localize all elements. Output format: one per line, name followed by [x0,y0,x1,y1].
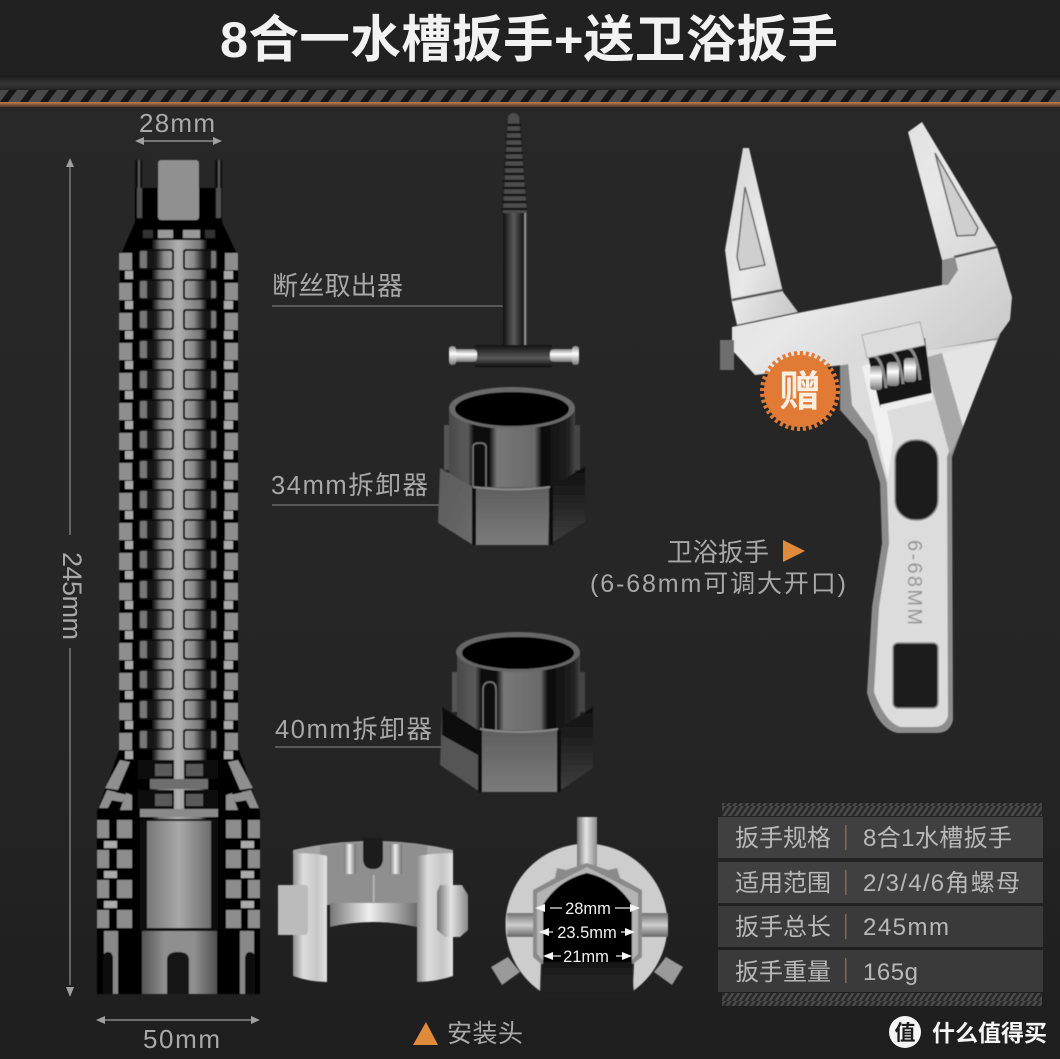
thumb screw end [720,340,734,370]
row: range: 适用范围 [735,870,831,897]
tube silhouette [97,188,260,994]
repeated knurl grid [118,249,240,759]
moving jaw [725,148,798,325]
top prongs [135,160,222,190]
label: install head [413,1020,523,1048]
header banner [0,0,1060,107]
center panel [140,819,218,930]
row: specification: 8合1水槽扳手 [863,825,1012,852]
label: bathroom wrench: (6-68mm可调大开口) [590,570,846,598]
fixed jaw and bar [732,122,1012,375]
row: length: 扳手总长 [735,914,831,941]
central light band [135,240,223,822]
label: broken screw extractor: 断丝取出器 [272,271,403,301]
gift badge [763,354,837,428]
size callouts: 28mm [565,900,611,918]
dimension: 245mm height [57,158,87,997]
row: range: 2/3/4/6角螺母 [863,870,1020,897]
row: weight: 165g [863,959,918,986]
34mm socket [438,387,585,545]
size callouts [557,900,617,966]
handle size text: 6-68MM [903,540,925,625]
dimension: 50mm width [96,1016,260,1054]
title: 8合一水槽扳手+送卫浴扳手 [220,11,838,68]
adjustable bathroom wrench [720,122,1012,733]
top square socket [158,160,199,220]
dimension: 50mm width: 50mm [143,1024,220,1054]
row: length [718,906,1043,947]
gift badge: 赠 [779,368,821,415]
40mm socket [440,632,593,792]
row: length: 245mm [863,914,949,941]
dimension: 245mm height: 245mm [57,552,87,640]
broken screw extractor tool [449,113,579,367]
side blocks [97,820,260,928]
watermark logo: 什么值得买 [932,1020,1047,1046]
row: specification [718,817,1043,858]
size callouts: 23.5mm [557,924,617,942]
label: install head: 安装头 [447,1020,523,1048]
label: 34mm remover: 34mm拆卸器 [271,472,428,500]
handle hole: oval [895,440,938,520]
watermark logo: 值 [894,1022,916,1045]
label: bathroom wrench: 卫浴扳手 [667,539,769,567]
watermark logo [889,1016,1047,1048]
sink wrench body [97,160,260,994]
row: weight: 扳手重量 [735,959,831,986]
row: weight [718,950,1043,992]
install head: side view [278,838,468,982]
label: bathroom wrench [590,539,846,598]
install head: end view with sizes [491,817,683,992]
dimension: 28mm width: 28mm [139,108,215,138]
spec table [718,803,1043,1006]
size callouts: 21mm [563,948,609,966]
foot with notch [142,931,217,994]
handle hole: slot [893,643,938,708]
knurl adjuster [867,338,933,412]
label: 40mm remover: 40mm拆卸器 [275,716,432,744]
handle and neck [840,335,1000,733]
row: range [718,862,1043,903]
flare blocks [99,760,259,810]
lower dark knurl rows [138,760,218,817]
row: specification: 扳手规格 [735,825,831,852]
